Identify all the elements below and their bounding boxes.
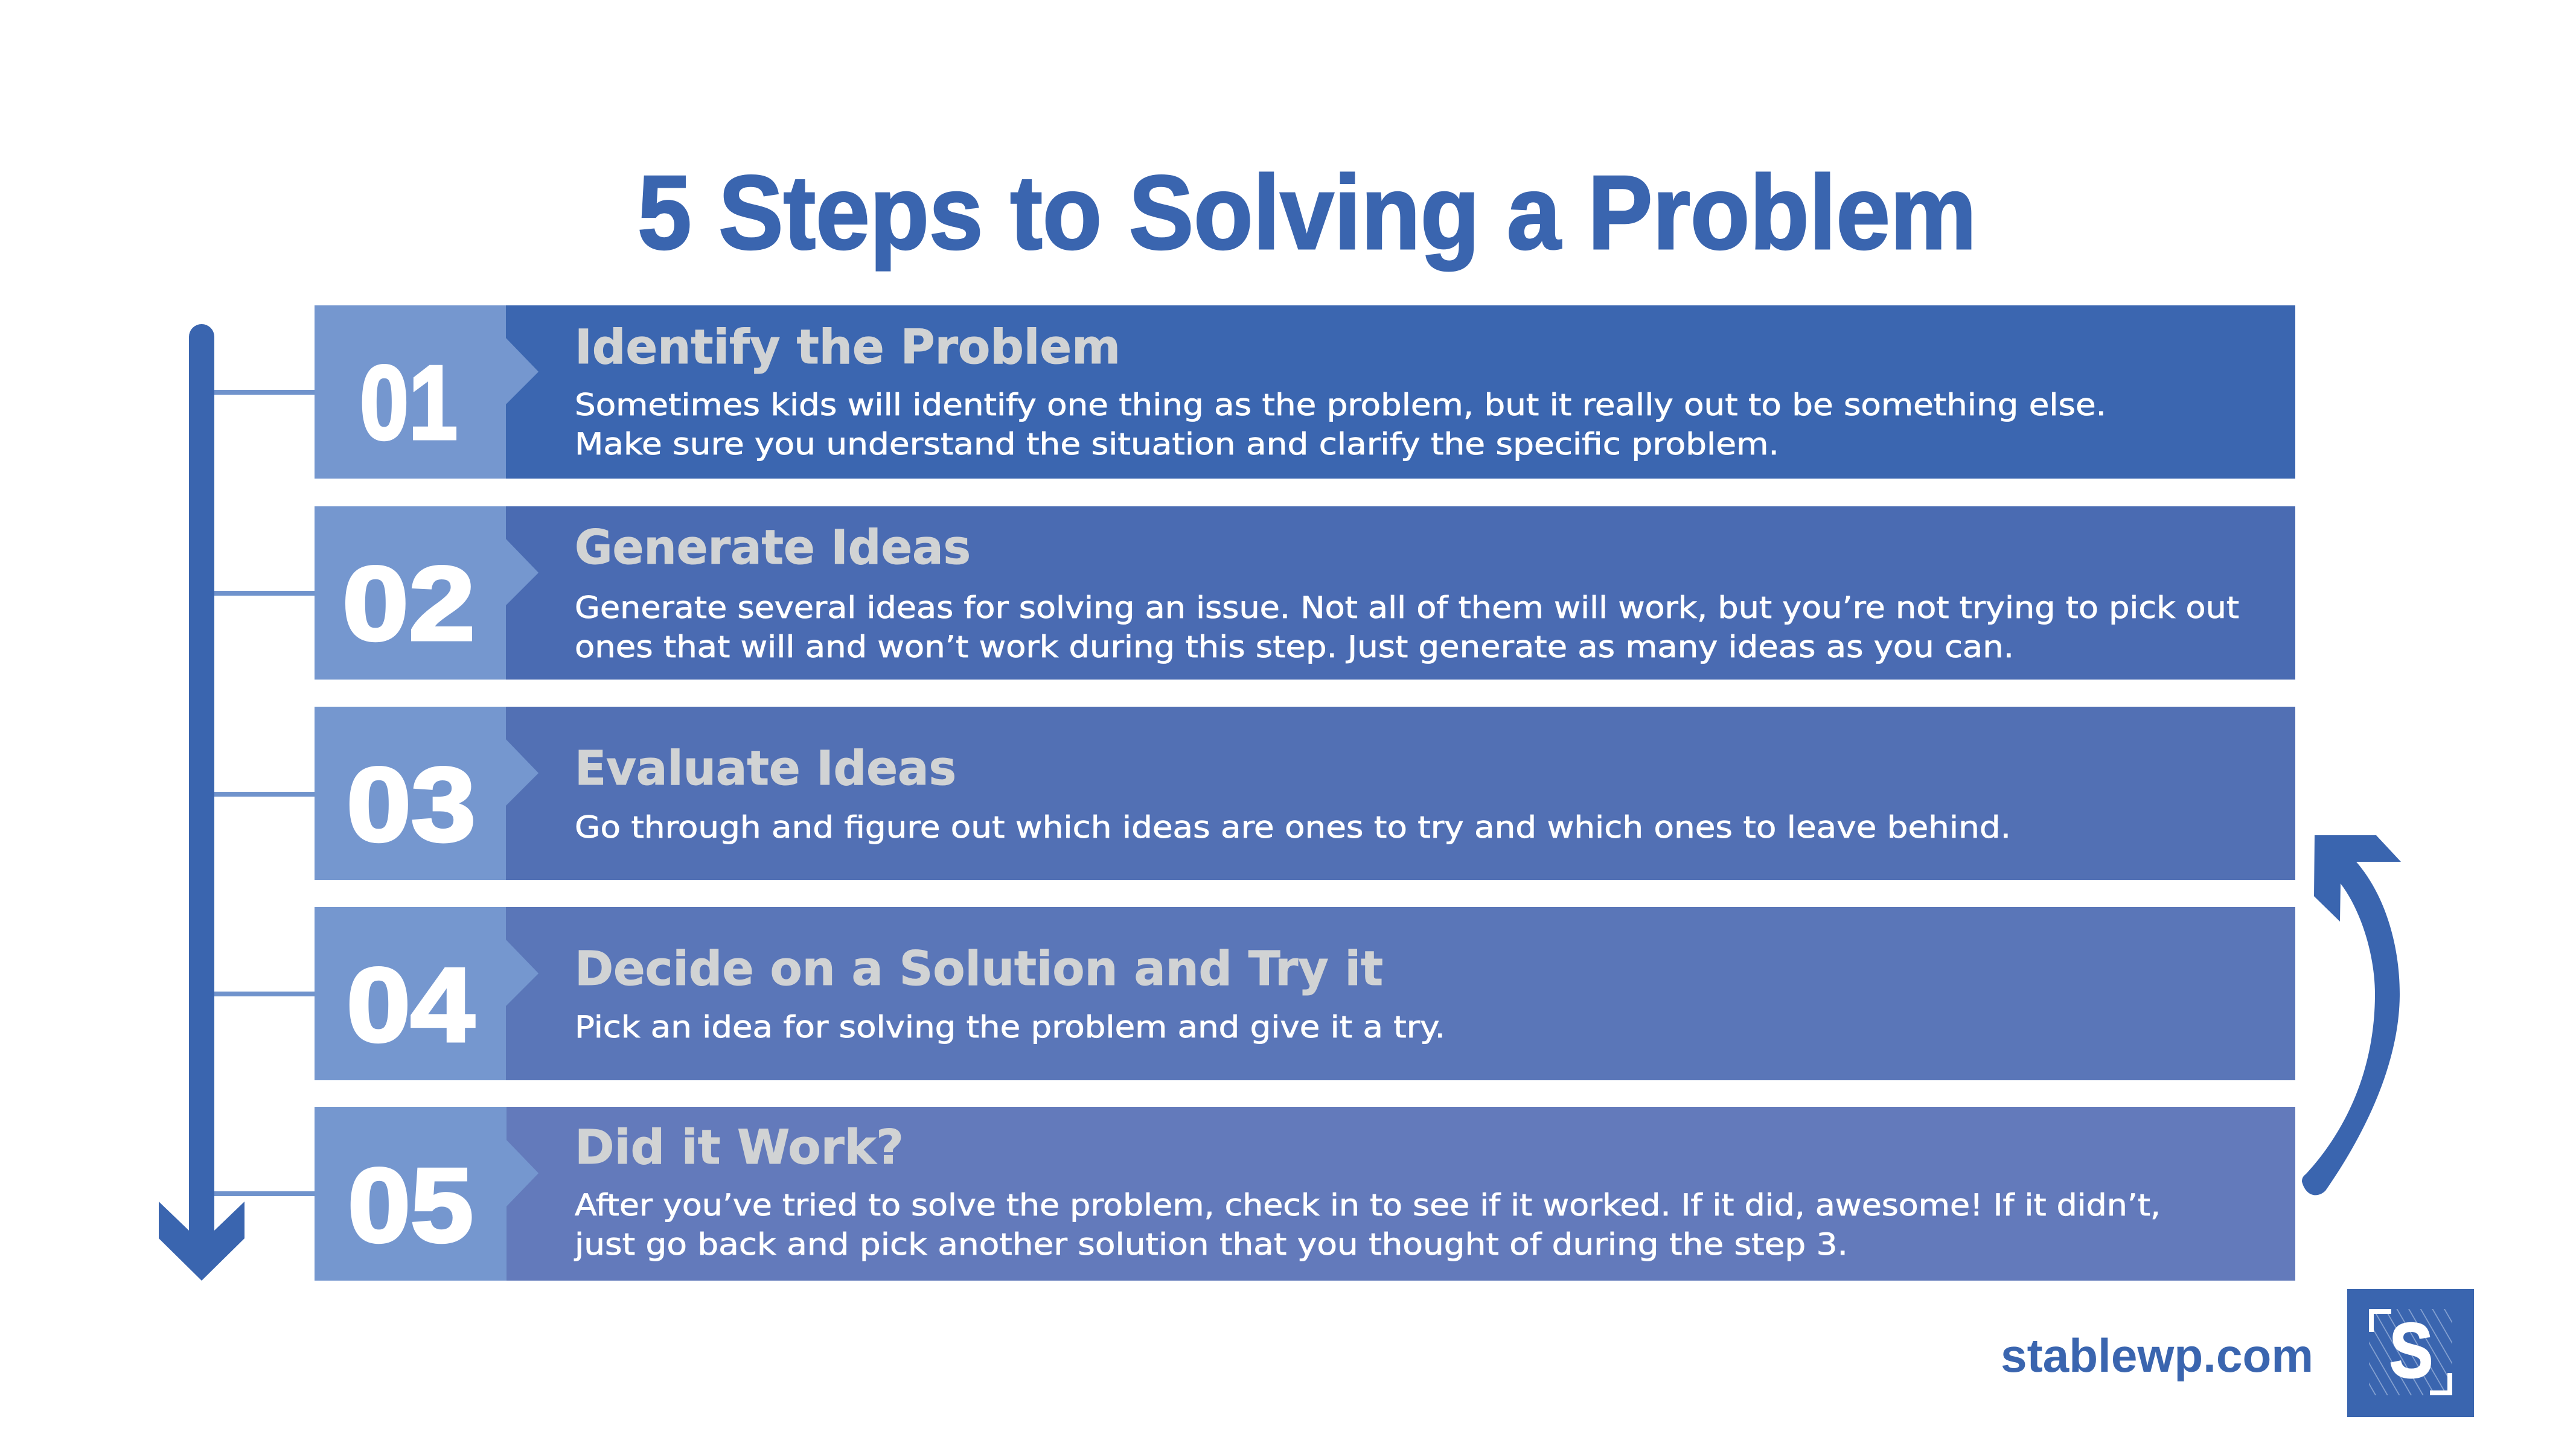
heading: step 5: Did it Work? (575, 1121, 904, 1175)
panel: step 1 (214, 305, 2295, 479)
title: 5 Steps to Solving a Problem (638, 153, 1977, 271)
step number 03: 03 (347, 745, 476, 863)
logo letter S: S (2389, 1308, 2433, 1394)
panel: step 2 (214, 506, 2295, 680)
text: step 2 description: ones that will and won’t work during this step. Just generate as many ideas as you can. (575, 629, 2014, 664)
text: step 5 description (574, 1188, 2161, 1262)
icon: stablewp logo (2347, 1289, 2474, 1417)
arrow: loop back to step 3 (2302, 835, 2401, 1195)
arrow: downward process arrow (159, 324, 244, 1281)
panel: step 3 (214, 707, 2295, 880)
heading: step 1: Identify the Problem (575, 320, 1120, 375)
heading: step 4: Decide on a Solution and Try it (575, 942, 1383, 996)
step number 01: 01 (360, 343, 458, 461)
text: step 5 description: just go back and pick another solution that you thought of during the step 3. (574, 1227, 1848, 1262)
text: step 1 description: Sometimes kids will identify one thing as the problem, but it really out to be something else. (575, 387, 2106, 422)
panel: step 5 (214, 1107, 2295, 1281)
text: step 1 description (575, 387, 2106, 462)
heading: step 3: Evaluate Ideas (575, 742, 956, 796)
panel: step 4 (214, 907, 2295, 1080)
step number 02: 02 (342, 544, 475, 662)
text: step 5 description: After you’ve tried to solve the problem, check in to see if it worked. If it did, awesome! If it didn’t, (575, 1188, 2161, 1223)
text: step 2 description (575, 590, 2239, 664)
step number 04: 04 (347, 946, 475, 1063)
heading: step 2: Generate Ideas (575, 521, 971, 575)
text: step 2 description: Generate several ideas for solving an issue. Not all of them will work, but you’re not trying to pick out (575, 590, 2239, 625)
text: step 4 description: Pick an idea for solving the problem and give it a try. (575, 1010, 1445, 1045)
text: step 1 description: Make sure you understand the situation and clarify the specific problem. (575, 427, 1779, 462)
step number 05: 05 (348, 1146, 473, 1264)
website url: stablewp.com (2001, 1329, 2313, 1382)
text: step 3 description: Go through and figure out which ideas are ones to try and which ones to leave behind. (575, 810, 2011, 845)
